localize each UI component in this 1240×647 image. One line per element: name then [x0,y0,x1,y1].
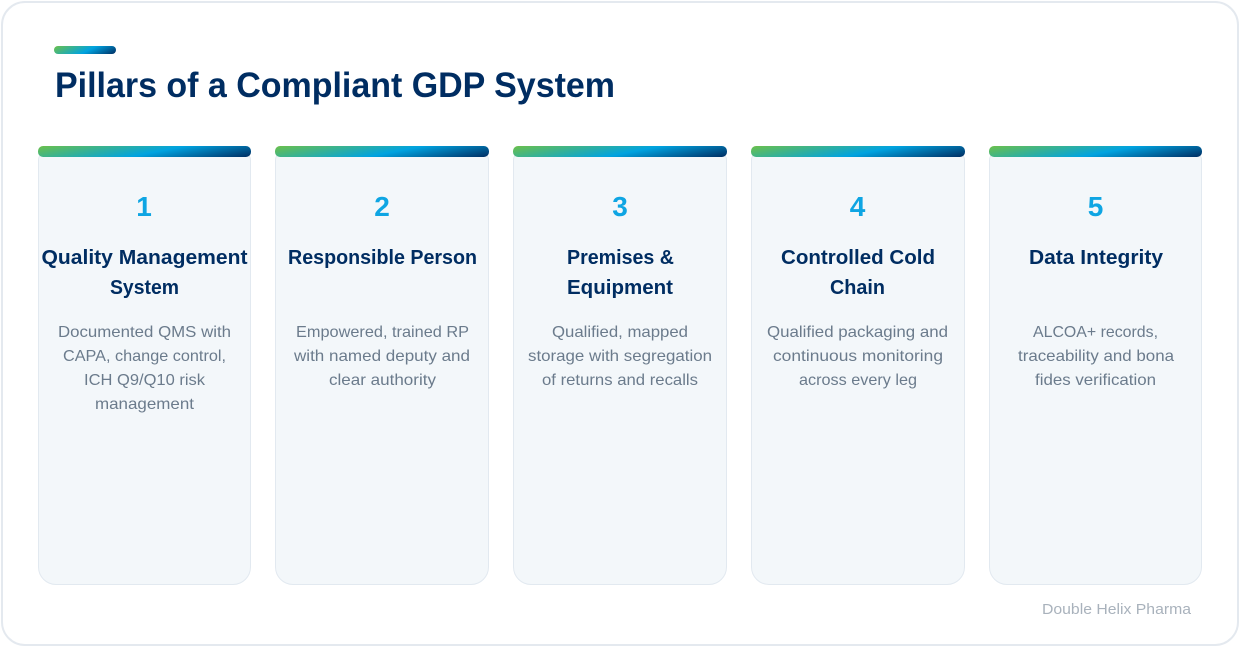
number 1: 1 [136,191,152,222]
description: management [95,396,195,413]
number 2: 2 [374,191,390,222]
description: Empowered, trained RP [296,324,469,341]
heading: Quality Management System [41,247,248,299]
description: Qualified, mapped [552,324,688,341]
panel: pillar 2 [275,146,489,585]
description: across every leg [799,372,917,389]
description: fides verification [1035,372,1156,389]
heading: Controlled Cold Chain: Controlled Cold [781,247,935,269]
panel: pillar 4 [751,146,965,585]
description: ICH Q9/Q10 risk [84,372,206,389]
footer brand: Double Helix Pharma [1042,601,1192,618]
description: traceability and bona [1018,348,1174,365]
panel: pillar 1 [38,146,251,585]
heading: Quality Management System: Quality Management [41,247,248,269]
number 5: 5 [1088,191,1103,222]
heading: Responsible Person: Responsible Person [288,247,477,269]
description [58,324,231,413]
description [293,324,470,389]
description: ALCOA+ records, [1033,324,1158,341]
description: CAPA, change control, [63,348,226,365]
heading: Premises & Equipment: Premises & [567,247,674,269]
description [528,324,712,389]
heading: Data Integrity: Data Integrity [1029,247,1164,269]
description: storage with segregation [528,348,712,365]
heading: Controlled Cold Chain: Chain [830,277,885,299]
heading: Controlled Cold Chain [781,247,935,299]
description [1018,324,1174,389]
heading: Premises & Equipment [567,247,674,299]
heading: Premises & Equipment: Equipment [567,277,673,299]
description: clear authority [329,372,436,389]
panel: pillar 5 [989,146,1202,585]
title accent bar [54,46,116,54]
description: of returns and recalls [542,372,698,389]
description: with named deputy and [293,348,470,365]
description [767,324,948,389]
panel: pillar 3 [513,146,727,585]
number 4: 4 [850,191,866,222]
description: Qualified packaging and [767,324,948,341]
number 3: 3 [612,191,628,222]
heading: Quality Management System: System [110,277,179,299]
description: Documented QMS with [58,324,231,341]
description: continuous monitoring [773,348,943,365]
title: Pillars of a Compliant GDP System [55,66,615,105]
